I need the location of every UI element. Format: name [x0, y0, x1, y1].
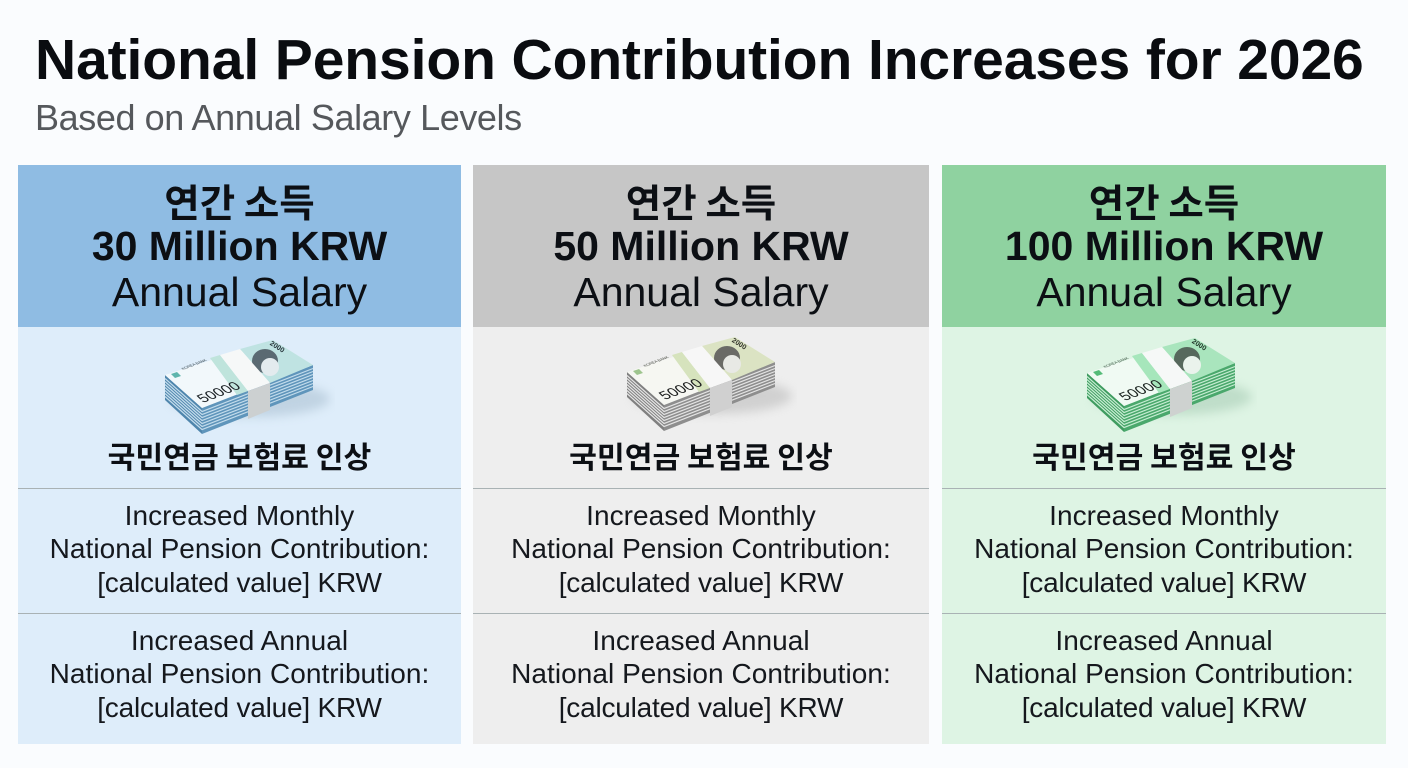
text: annual contribution: Increased Annual: [592, 625, 810, 656]
label: pension premium increase: 국민연금 보험료 인상: [1032, 433, 1296, 477]
text: annual contribution: Increased Annual: [131, 625, 348, 656]
text: monthly contribution: Increased Monthly: [1049, 500, 1279, 531]
icon: green banknote stack: 2000: [1190, 338, 1207, 353]
title: National Pension Contribution Increases for 2026: [35, 28, 1364, 92]
divider: [942, 488, 1386, 489]
text: monthly contribution: [calculated value] KRW: [559, 567, 843, 598]
text: annual contribution: National Pension Contribution:: [50, 658, 429, 689]
header: 50 million KRW: [473, 165, 929, 327]
header: 50 million KRW: Annual Salary: [573, 269, 829, 315]
icon: blue banknote stack: 2000: [268, 340, 285, 355]
text: annual contribution: [calculated value] KRW: [97, 692, 382, 723]
icon: grey banknote stack: KOREA BANK: [642, 355, 670, 368]
subtitle: Based on Annual Salary Levels: [35, 97, 522, 138]
text: annual contribution: [calculated value] KRW: [559, 692, 843, 723]
header: 50 million KRW: 연간 소득: [626, 173, 776, 229]
divider: [473, 488, 929, 489]
header: 100 million KRW: 100 Million KRW: [1005, 223, 1323, 269]
header: 100 million KRW: 연간 소득: [1089, 173, 1239, 229]
header: 100 million KRW: [942, 165, 1386, 327]
icon: blue banknote stack: 50000: [193, 379, 245, 406]
divider: [942, 613, 1386, 614]
text: monthly contribution: [calculated value] KRW: [97, 567, 382, 598]
text: monthly contribution: [511, 500, 891, 598]
icon: green banknote stack: 50000: [1115, 377, 1167, 404]
icon: grey banknote stack: 50000: [655, 376, 707, 403]
header: 30 million KRW: 연간 소득: [164, 173, 315, 229]
icon: grey banknote stack: 2000: [730, 337, 747, 352]
text: annual contribution: [974, 625, 1354, 723]
icon: blue banknote stack: [164, 340, 331, 434]
text: annual contribution: [50, 625, 429, 723]
divider: [18, 488, 461, 489]
text: monthly contribution: [974, 500, 1354, 598]
text: annual contribution: Increased Annual: [1055, 625, 1273, 656]
text: monthly contribution: National Pension Contribution:: [50, 533, 429, 564]
divider: [18, 613, 461, 614]
text: annual contribution: [calculated value] KRW: [1022, 692, 1306, 723]
header: 50 million KRW: 50 Million KRW: [553, 223, 849, 269]
text: monthly contribution: Increased Monthly: [125, 500, 354, 531]
icon: green banknote stack: KOREA BANK: [1102, 356, 1130, 369]
text: annual contribution: National Pension Contribution:: [974, 658, 1354, 689]
text: annual contribution: National Pension Contribution:: [511, 658, 891, 689]
panel: 30 million KRW: [18, 165, 461, 744]
text: monthly contribution: Increased Monthly: [586, 500, 816, 531]
panel: 100 million KRW: [942, 165, 1386, 744]
panel: 50 million KRW: [473, 165, 929, 744]
text: annual contribution: [511, 625, 891, 723]
text: monthly contribution: National Pension Contribution:: [974, 533, 1354, 564]
header: 30 million KRW: [18, 165, 461, 327]
header: 100 million KRW: Annual Salary: [1036, 269, 1292, 315]
icon: blue banknote stack: KOREA BANK: [180, 358, 208, 371]
icon: grey banknote stack: [627, 337, 793, 431]
label: pension premium increase: 국민연금 보험료 인상: [108, 433, 371, 477]
label: pension premium increase: 국민연금 보험료 인상: [569, 433, 833, 477]
header: 30 million KRW: 30 Million KRW: [92, 223, 387, 269]
text: monthly contribution: [50, 500, 429, 598]
divider: [473, 613, 929, 614]
text: monthly contribution: [calculated value] KRW: [1022, 567, 1306, 598]
header: 30 million KRW: Annual Salary: [112, 269, 367, 315]
icon: green banknote stack: [1086, 338, 1253, 432]
text: monthly contribution: National Pension Contribution:: [511, 533, 891, 564]
